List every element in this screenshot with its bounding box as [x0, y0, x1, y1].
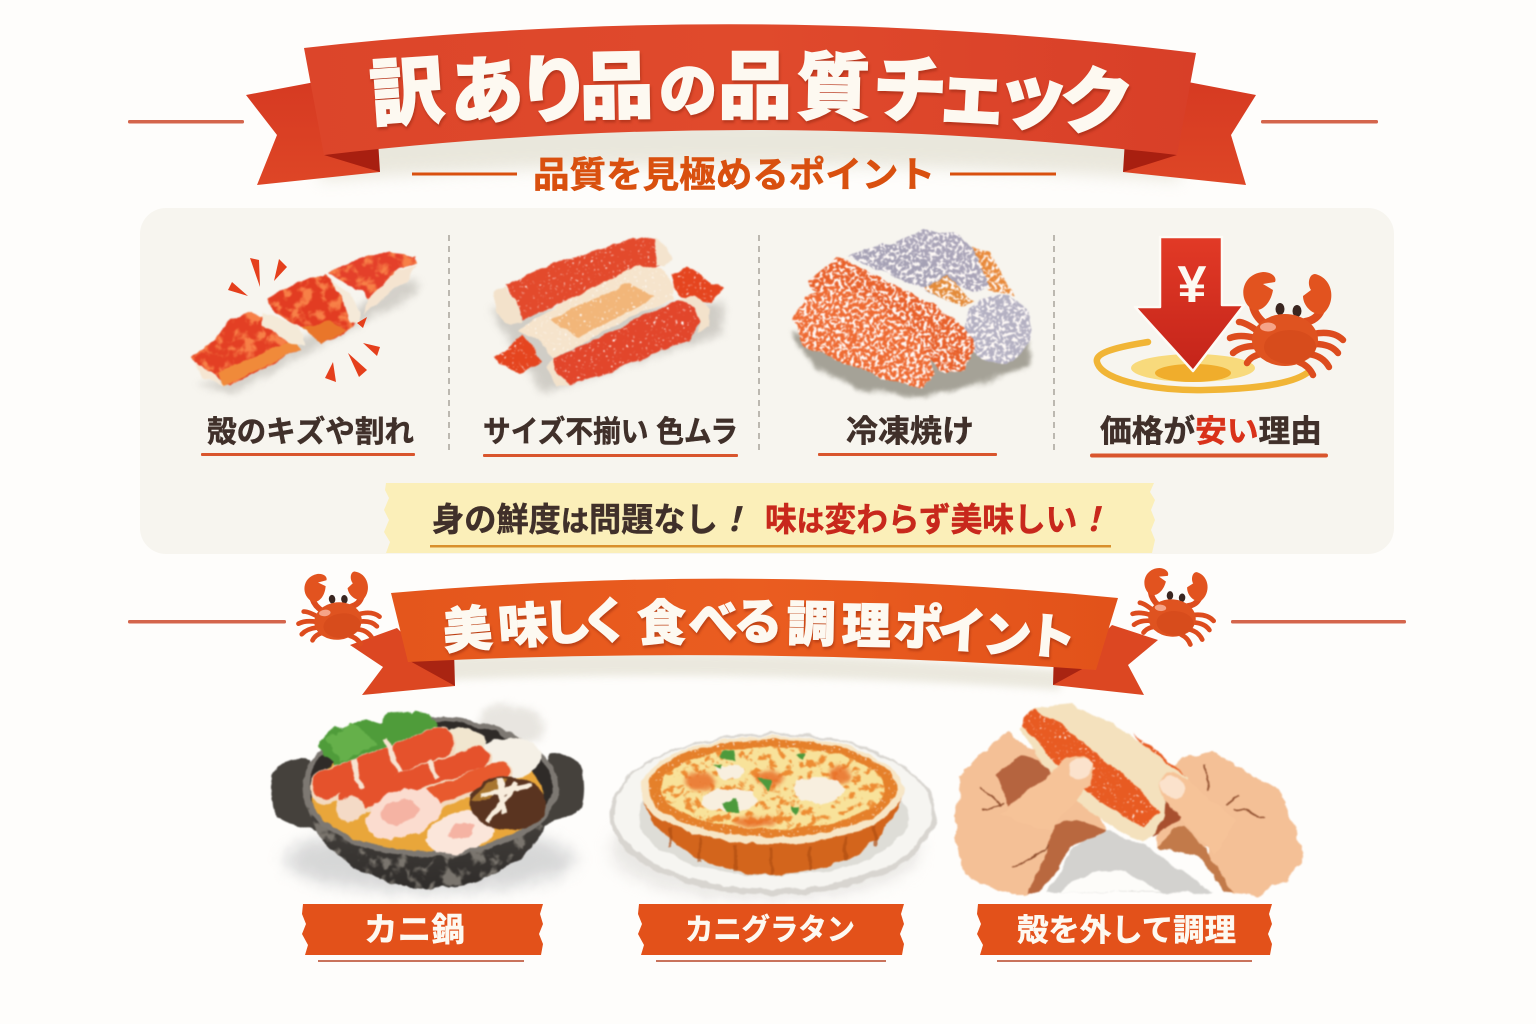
callout: freshness note: 味は変わらず美味しい！	[765, 501, 1109, 538]
crab meat	[337, 779, 500, 862]
side line: title right	[1261, 120, 1378, 124]
label: 殻のキズや割れ	[207, 415, 414, 449]
dish: removing the shell	[956, 703, 1303, 962]
callout: freshness note	[384, 483, 1155, 553]
tag underline	[997, 960, 1252, 962]
item: why the price is low	[1090, 237, 1343, 458]
left thumb	[1000, 756, 1093, 830]
tag underline	[318, 960, 524, 962]
tag	[977, 904, 1272, 955]
dish: crab hot pot	[272, 705, 584, 962]
crab legs	[325, 742, 502, 802]
tag text: カニ鍋	[364, 911, 465, 948]
subtitle: 品質を見極めるポイント	[533, 154, 935, 195]
ribbon front	[391, 579, 1118, 670]
icon: three crab legs	[490, 237, 722, 393]
tofu and cabbage	[478, 737, 542, 777]
title text: 品質チェック	[718, 45, 1137, 147]
right hand	[1157, 753, 1303, 895]
ribbon right tail	[1053, 625, 1158, 695]
right thumb	[1160, 773, 1235, 855]
tag underline	[656, 960, 886, 962]
icon: falling price arrow with yen	[1135, 237, 1244, 371]
ribbon left tail	[246, 82, 380, 185]
dish: crab gratin	[610, 733, 936, 962]
side line: section right	[1231, 620, 1406, 624]
ribbon front	[304, 24, 1196, 155]
title text: の	[659, 59, 717, 124]
title text: 訳あり品	[367, 45, 654, 137]
tag text: 殻を外して調理	[1017, 913, 1236, 948]
icon: burst marks	[228, 258, 380, 382]
subtitle	[412, 154, 1056, 195]
item: freezer burn	[791, 230, 1031, 456]
icon: cracked crab leg	[190, 253, 420, 392]
section heading: 美味しく食べる調理ポイント	[441, 594, 1078, 667]
ribbon right tail	[1123, 82, 1256, 185]
label: サイズ不揃い 色ムラ	[483, 415, 738, 449]
icon: falling price arrow with yen: ¥	[1178, 256, 1207, 314]
icon: frosted crab legs	[791, 230, 1031, 397]
parsley	[714, 750, 806, 816]
underline	[818, 453, 997, 456]
title ribbon	[246, 24, 1256, 185]
underline	[1090, 454, 1328, 458]
left hand	[956, 733, 1107, 893]
crab leg	[1018, 703, 1190, 843]
illustration: clay pot	[272, 705, 584, 892]
illustration: gratin on plate	[610, 733, 936, 900]
shiitake	[470, 776, 546, 830]
label: 冷凍焼け	[846, 414, 974, 449]
crab chunks	[702, 765, 844, 811]
callout: freshness note: 身の鮮度は問題なし！	[432, 501, 750, 538]
icon: crab	[1230, 272, 1343, 375]
tag	[302, 904, 543, 955]
icon: crab right of heading	[1131, 566, 1217, 646]
side line: title left	[128, 120, 244, 124]
icon: crab left of heading	[293, 568, 382, 650]
greens	[316, 711, 438, 772]
label: 価格が安い理由	[1100, 414, 1322, 449]
side line: section left	[128, 620, 286, 624]
tag text: カニグラタン	[685, 914, 855, 947]
illustration: hands holding crab leg	[956, 703, 1303, 895]
cooking ribbon	[350, 579, 1158, 695]
sauce spots	[685, 766, 852, 827]
ribbon left tail	[350, 628, 455, 695]
underline	[201, 453, 415, 456]
item: uneven size and colour	[483, 237, 738, 457]
panel: quality points	[140, 208, 1394, 554]
icon: yellow rings	[1097, 342, 1307, 390]
item: shell damage	[190, 253, 420, 456]
underline	[483, 454, 738, 457]
tag	[638, 904, 904, 955]
